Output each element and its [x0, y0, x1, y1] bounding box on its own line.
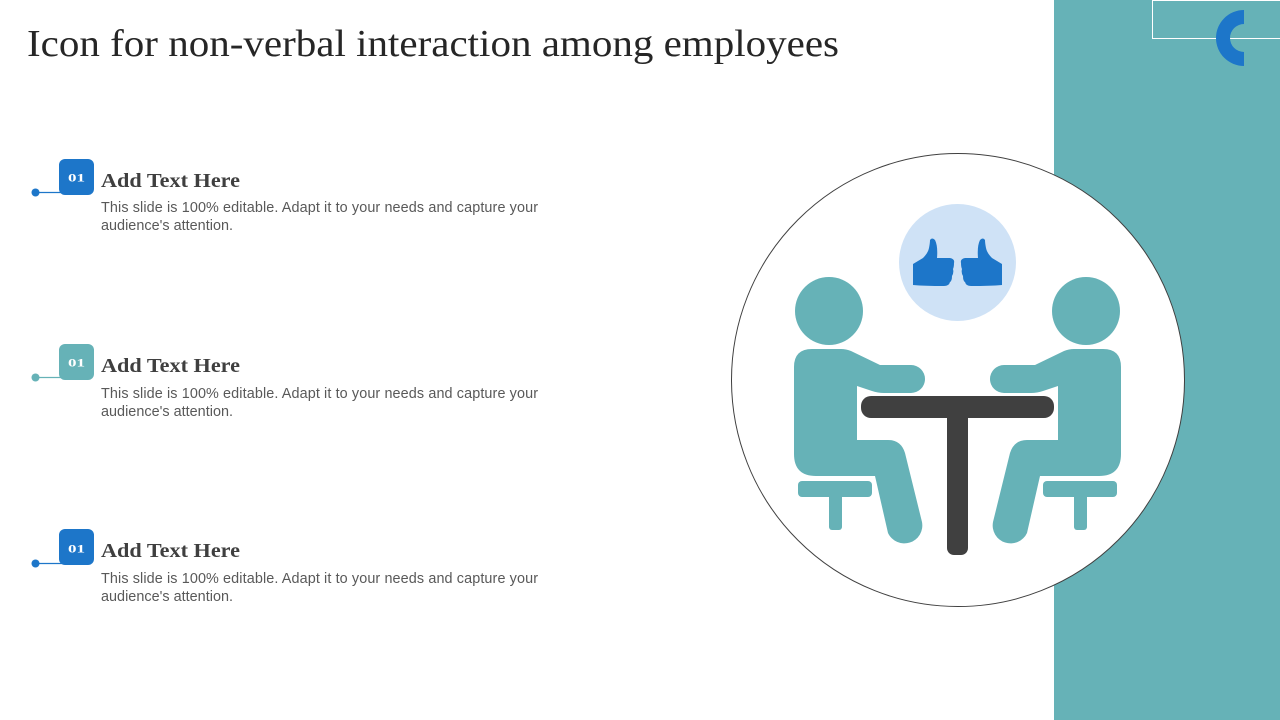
- connector dot and line 2: [32, 374, 62, 382]
- number badge 3: 01: [68, 542, 85, 556]
- body text 3: This slide is 100% editable. Adapt it to your needs and capture your: [101, 571, 538, 587]
- thumbs-up bubble: [899, 204, 1016, 321]
- teal side panel: [1054, 0, 1280, 720]
- number badge 1: 01: [68, 170, 85, 184]
- corner decoration: [1152, 0, 1280, 66]
- icon: two people at a table: [732, 154, 1184, 606]
- right person: [990, 277, 1121, 543]
- list item 1: [32, 159, 538, 234]
- body text 1: This slide is 100% editable. Adapt it to your needs and capture your: [101, 200, 538, 216]
- icon: right thumb: [961, 238, 1002, 286]
- body text 2: This slide is 100% editable. Adapt it to your needs and capture your: [101, 386, 538, 402]
- number badge 2: [59, 344, 94, 380]
- body text 3: audience's attention.: [101, 589, 233, 605]
- number badge 3: [59, 529, 94, 565]
- heading 3: Add Text Here: [101, 540, 240, 562]
- heading 2: Add Text Here: [101, 355, 240, 377]
- number badge 2: 01: [68, 356, 85, 370]
- list item 3: [32, 529, 538, 605]
- connector dot and line 3: [32, 560, 62, 568]
- left person: [794, 277, 925, 543]
- outline circle: [732, 154, 1184, 606]
- connector dot and line 1: [32, 188, 62, 196]
- heading 1: Add Text Here: [101, 170, 240, 192]
- body text 2: audience's attention.: [101, 404, 233, 420]
- list item 2: [32, 344, 538, 420]
- body text 1: audience's attention.: [101, 218, 233, 234]
- title: Icon for non-verbal interaction among employees: [27, 23, 839, 65]
- icon: left thumb: [913, 238, 954, 286]
- table: [861, 396, 1054, 555]
- number badge 1: [59, 159, 94, 195]
